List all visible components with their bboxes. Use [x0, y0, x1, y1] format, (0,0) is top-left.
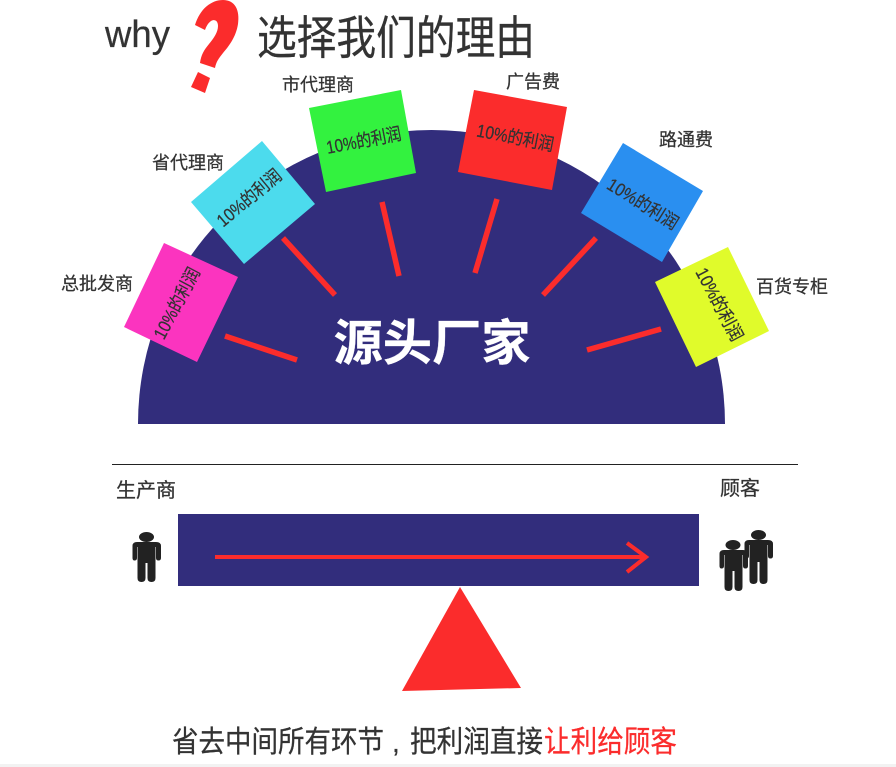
card: green	[309, 90, 416, 192]
beam bar	[178, 514, 699, 586]
caption highlight: 让利给顾客	[544, 726, 677, 759]
title word: why: why	[104, 14, 170, 56]
label: wholesaler: 总批发商	[61, 274, 133, 294]
icon: red question mark	[191, 0, 238, 93]
fulcrum triangle	[402, 587, 521, 691]
icon: producer person	[132, 532, 161, 582]
center label: 源头厂家	[334, 317, 530, 371]
caption comma: ,	[392, 727, 400, 758]
card: green: 10%的利润	[325, 124, 403, 158]
card: cyan: 10%的利润	[213, 165, 286, 231]
label: department store: 百货专柜	[756, 277, 828, 297]
channel labels	[61, 72, 828, 297]
label: tolls: 路通费	[659, 130, 713, 150]
card: blue	[581, 143, 703, 262]
label: advertising: 广告费	[506, 72, 560, 92]
bottom edge	[0, 764, 896, 767]
card: yellow	[655, 247, 769, 367]
card: red: 10%的利润	[475, 121, 555, 155]
title heading: 选择我们的理由	[257, 12, 535, 64]
caption middle: 把利润直接	[410, 726, 543, 759]
label: producer: 生产商	[116, 479, 176, 502]
card: pink: 10%的利润	[150, 264, 204, 343]
card: yellow: 10%的利润	[691, 264, 747, 344]
card: red	[458, 90, 567, 190]
bottom caption	[172, 726, 677, 759]
label: provincial agent: 省代理商	[152, 153, 224, 173]
icon: customer people	[720, 530, 773, 591]
card: cyan	[191, 141, 315, 264]
card: pink	[124, 243, 238, 362]
red ray lines	[225, 199, 661, 360]
card: blue: 10%的利润	[603, 174, 682, 234]
title	[104, 0, 535, 93]
label: city agent: 市代理商	[282, 75, 354, 95]
label: customer: 顾客	[720, 477, 760, 500]
arrow	[215, 543, 646, 572]
semicircle: source factory	[138, 130, 725, 424]
bottom caption: 省去中间所有环节	[172, 726, 384, 759]
divider	[112, 464, 798, 466]
